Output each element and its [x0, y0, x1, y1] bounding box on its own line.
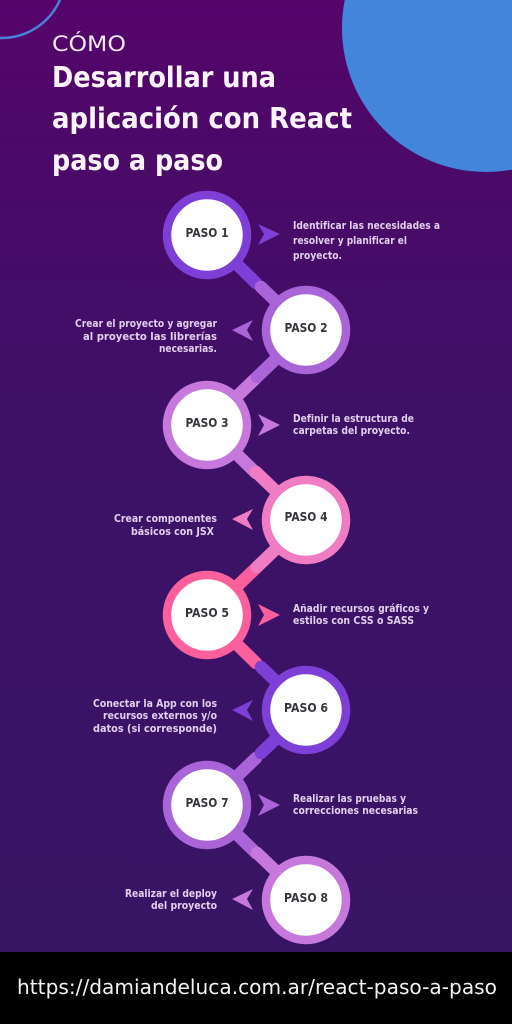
step 3 text: [293, 412, 414, 437]
title line 3: paso a paso: [52, 144, 223, 177]
step 6 text: recursos externos y/o: [103, 709, 217, 722]
step 4 text: básicos con JSX: [131, 525, 214, 538]
step 1 text: resolver y planificar el: [293, 234, 407, 247]
step 3: [167, 385, 414, 465]
step 1 text: Identificar las necesidades a: [293, 219, 440, 232]
step 3 arrow: [258, 414, 280, 436]
step 2 node: [266, 290, 346, 370]
step 5 text: Añadir recursos gráficos y: [293, 602, 429, 615]
step 3 text: Definir la estructura de: [293, 412, 414, 425]
decorative blue ring: [0, 0, 65, 38]
step 1 node: [167, 195, 247, 275]
step 4: [114, 480, 346, 560]
step 7 node: [167, 765, 247, 845]
step 2 text: [75, 317, 217, 355]
step 4 arrow: [232, 509, 253, 530]
step 7 node: PASO 7: [186, 795, 228, 810]
step 7 arrow: [258, 794, 280, 816]
step 7 text: Realizar las pruebas y: [293, 792, 406, 805]
step 8 node: [266, 860, 346, 940]
step 2 arrow: [232, 320, 253, 341]
step 8 arrow: [232, 889, 253, 910]
step 6 text: [93, 697, 217, 735]
step 2 text: necesarias.: [159, 342, 217, 355]
step 5 text: estilos con CSS o SASS: [293, 614, 414, 627]
step 4 node: [266, 480, 346, 560]
step 2 node: PASO 2: [284, 320, 328, 335]
step 6 arrow: [232, 700, 253, 721]
title kicker: CÓMO: [52, 31, 126, 56]
step 3 node: PASO 3: [186, 415, 228, 430]
step 5: [167, 575, 429, 655]
connectors between steps: [207, 235, 306, 900]
step 5 node: PASO 5: [185, 605, 229, 620]
decorative blue circle: [342, 0, 512, 172]
step 4 node: PASO 4: [284, 509, 328, 524]
step 7 text: correcciones necesarias: [293, 804, 418, 817]
step 7: [167, 765, 418, 845]
step 1 text: [293, 219, 440, 262]
step 7 text: [293, 792, 418, 817]
step 2: [75, 290, 346, 370]
title line 2: aplicación con React: [52, 102, 352, 135]
step 3 text: carpetas del proyecto.: [293, 424, 410, 437]
step 6: [93, 670, 346, 750]
step 5 node: [167, 575, 247, 655]
step 8 node: PASO 8: [284, 890, 328, 905]
step 6 text: datos (si corresponde): [93, 722, 217, 735]
step 4 text: [114, 512, 217, 538]
step 2 text: al proyecto las librerías: [83, 330, 217, 343]
step 1 node: PASO 1: [186, 225, 228, 240]
step 6 text: Conectar la App con los: [93, 697, 217, 710]
step 1 text: proyecto.: [293, 249, 342, 262]
step 5 text: [293, 602, 429, 627]
step 8: [125, 860, 346, 940]
step 5 arrow: [258, 604, 280, 626]
step 8 text: [125, 887, 217, 912]
step 2 text: Crear el proyecto y agregar: [75, 317, 217, 330]
footer bar: [0, 952, 512, 1024]
step 8 text: del proyecto: [151, 899, 217, 912]
step 6 node: PASO 6: [284, 700, 328, 715]
step 4 text: Crear componentes: [114, 512, 217, 525]
step 1 arrow: [258, 224, 280, 245]
footer url: https://damiandeluca.com.ar/react-paso-a-paso: [17, 975, 497, 999]
step 3 node: [167, 385, 247, 465]
title: [52, 31, 352, 177]
step 1: [167, 195, 440, 275]
step 8 text: Realizar el deploy: [125, 887, 217, 900]
title line 1: Desarrollar una: [52, 61, 276, 94]
step 6 node: [266, 670, 346, 750]
